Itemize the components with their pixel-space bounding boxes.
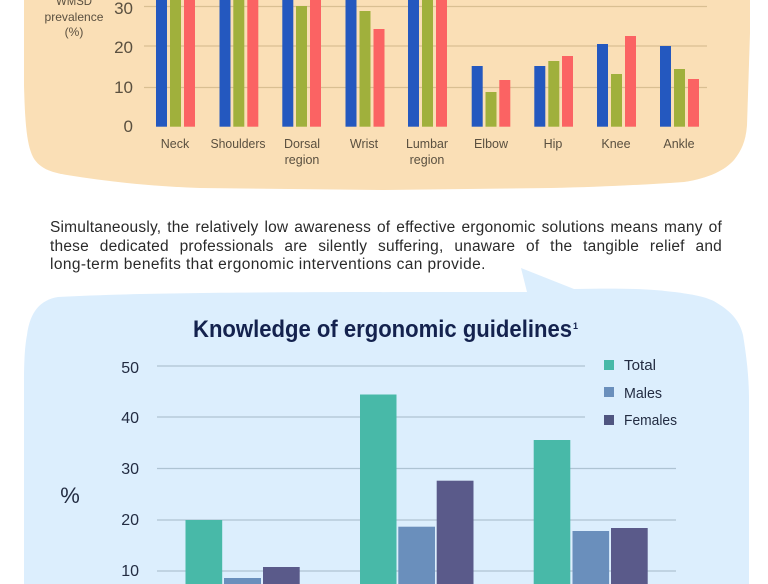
paragraph: long-term benefits that ergonomic interventions can provide. [50, 256, 486, 273]
x axis labels: Elbow [474, 137, 509, 151]
bars: elbow [472, 66, 510, 127]
y axis title: prevalence [44, 10, 104, 24]
x axis labels: Knee [601, 137, 631, 151]
paragraph: Simultaneously, the relatively low awareness of effective ergonomic solutions means many of [50, 219, 722, 236]
bars: group 2 [360, 394, 474, 584]
x axis labels: Neck [161, 137, 190, 151]
bars: dorsal region [282, 0, 321, 127]
legend: Females [624, 413, 677, 429]
legend [604, 358, 677, 429]
bars: shoulders [220, 0, 258, 127]
x axis labels: Hip [544, 137, 562, 151]
x axis labels: region [410, 153, 444, 167]
bars: group 1 [186, 520, 300, 584]
x axis labels: Shoulders [210, 137, 266, 151]
y axis labels: 10 [121, 563, 139, 580]
legend: Males [624, 386, 662, 402]
y axis title [44, 0, 104, 39]
y axis labels: 20 [121, 512, 139, 529]
bars: ankle [660, 46, 699, 127]
y axis labels: 0 [124, 117, 133, 136]
panel: WMSD prevalence [24, 0, 750, 190]
y axis title: (%) [65, 25, 83, 39]
bars: wrist [346, 0, 384, 127]
bars: knee [597, 36, 636, 127]
y axis unit: % [60, 483, 80, 508]
title superscript: 1 [573, 321, 578, 331]
panel: knowledge of ergonomic guidelines [24, 268, 749, 584]
chart title: Knowledge of ergonomic guidelines [193, 316, 572, 343]
legend: Total [624, 358, 656, 374]
y axis labels: 10 [114, 78, 133, 97]
bars: hip [534, 56, 573, 127]
x axis labels: region [285, 153, 319, 167]
bars: lumbar region [408, 0, 447, 127]
paragraph [50, 219, 722, 273]
y axis labels [114, 0, 133, 136]
y axis labels: 30 [121, 461, 139, 478]
bars: group 3 [534, 440, 648, 584]
x axis labels: Ankle [663, 137, 695, 151]
y axis labels: 40 [121, 410, 139, 427]
x axis labels: Wrist [350, 137, 379, 151]
y axis labels: 50 [121, 360, 139, 377]
x axis labels: Dorsal [284, 137, 320, 151]
paragraph: these dedicated professionals are silently suffering, unaware of the tangible relief and [50, 238, 722, 254]
bars: neck [156, 0, 195, 127]
x axis labels: Lumbar [406, 137, 448, 151]
y axis labels: 20 [114, 38, 133, 57]
y axis labels [121, 360, 139, 580]
x axis labels [161, 137, 695, 167]
